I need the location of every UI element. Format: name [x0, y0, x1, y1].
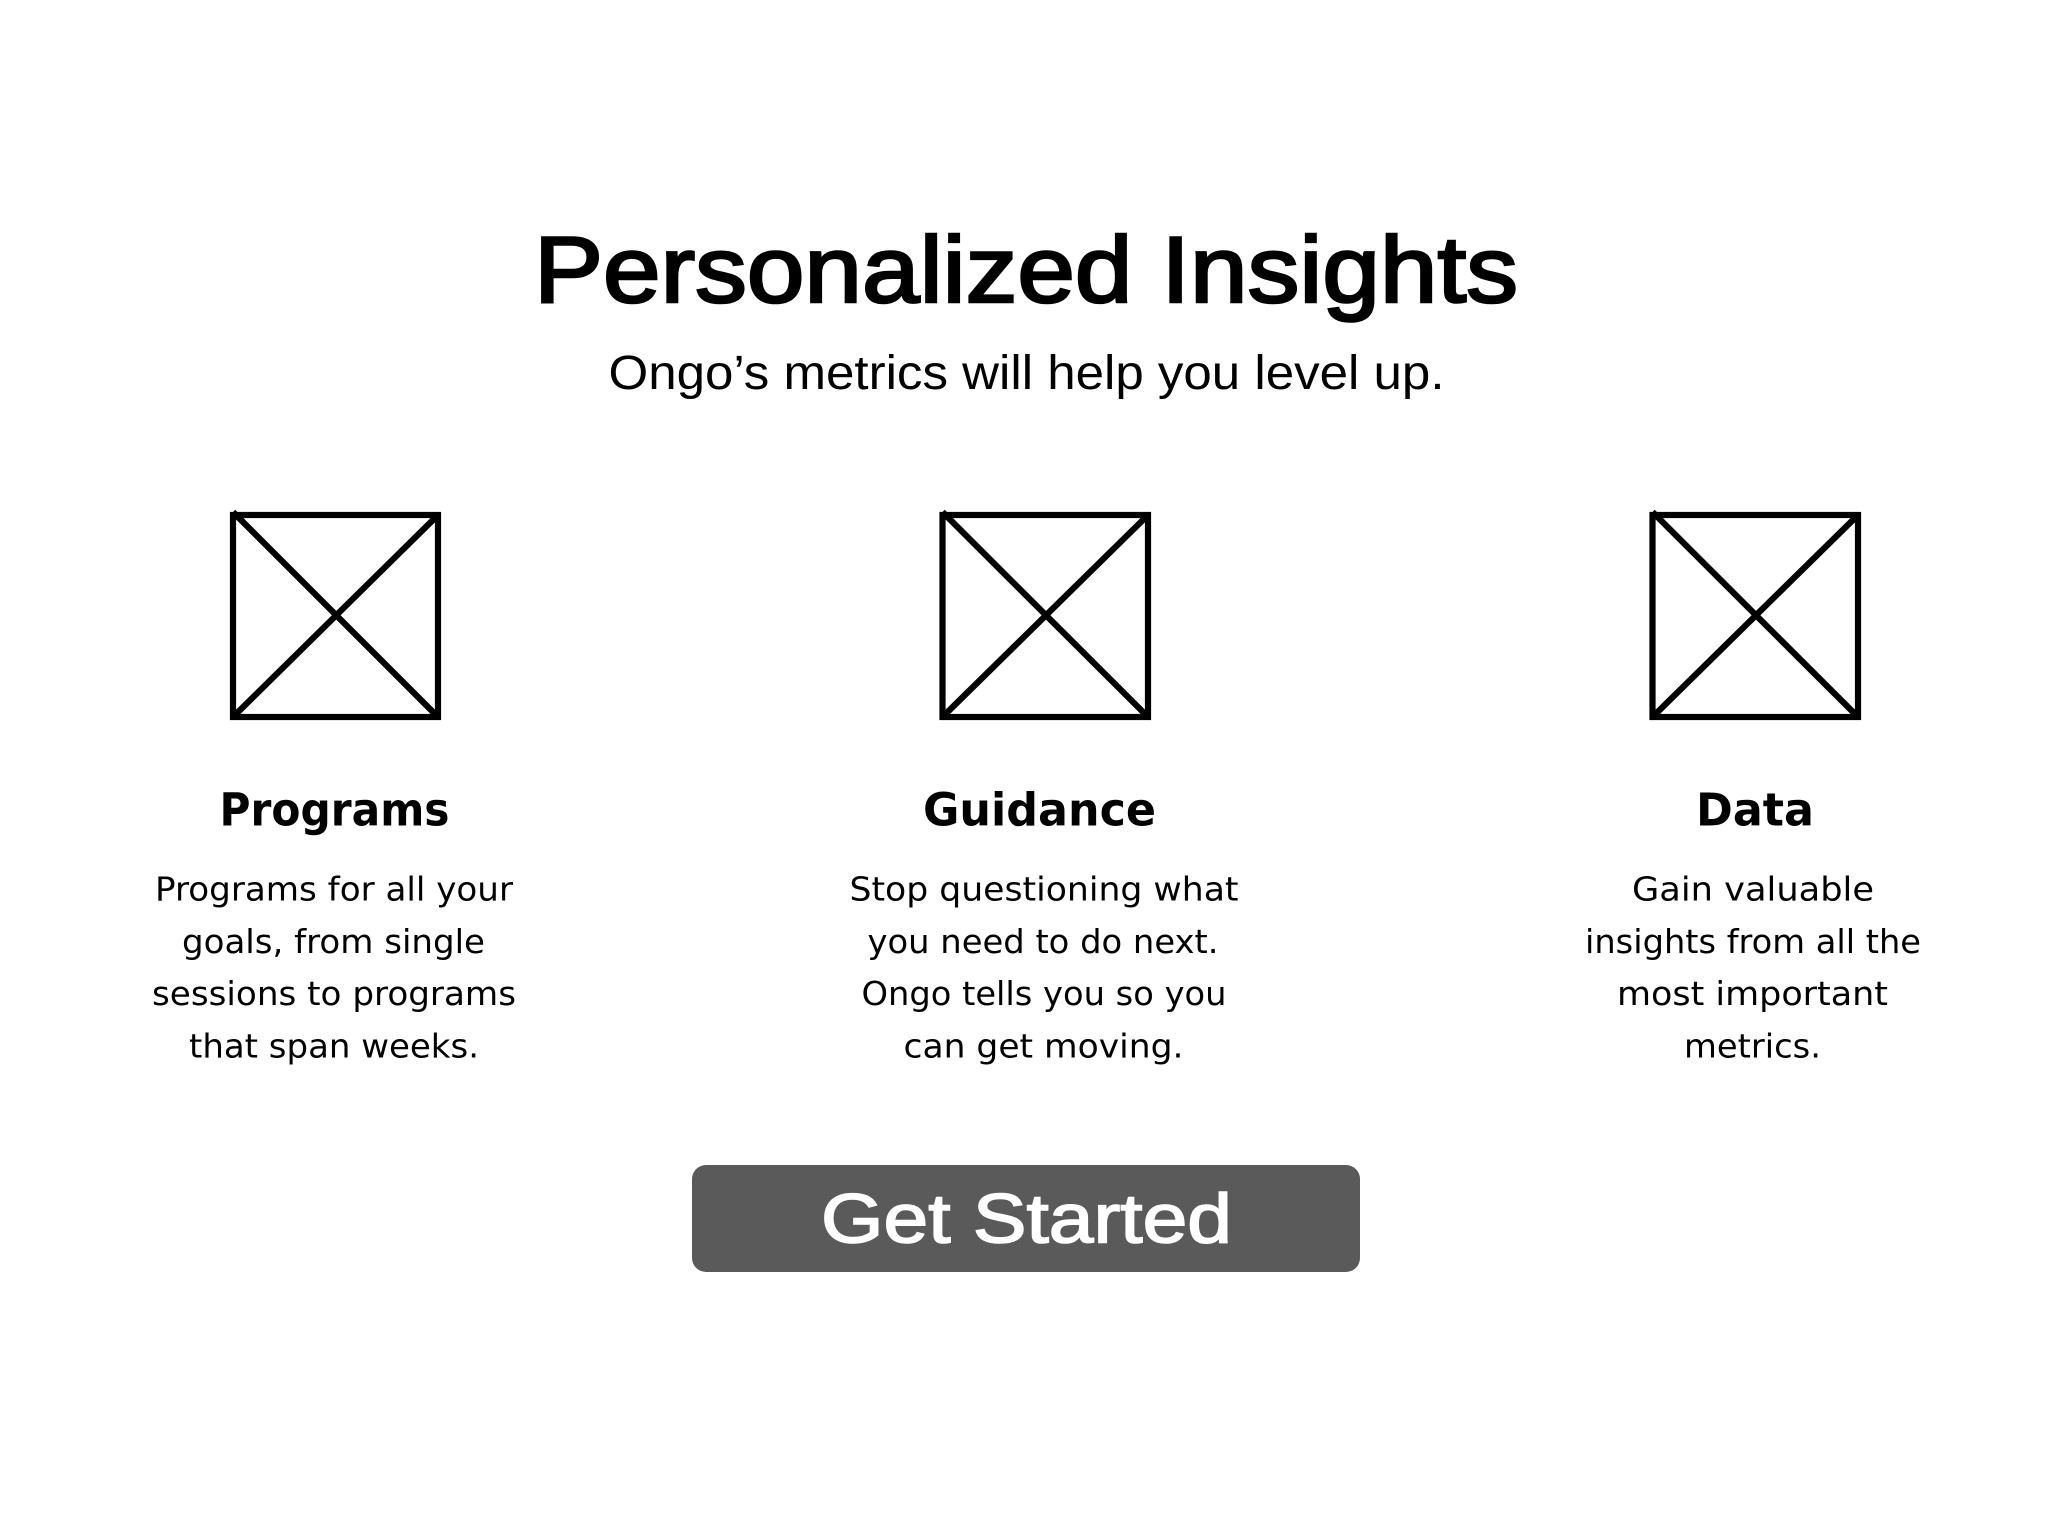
subtitle: Ongo’s metrics will help you level up.: [608, 347, 1444, 400]
text block: guidance: Ongo tells you so you: [862, 974, 1226, 1013]
title: Personalized Insights: [534, 217, 1518, 322]
text block: guidance: can get moving.: [904, 1026, 1184, 1066]
text block: guidance: [850, 870, 1239, 1066]
button: get started: [692, 1165, 1360, 1272]
text block: programs: Programs for all your: [155, 870, 513, 908]
panel: programs: [152, 512, 516, 1066]
text block: guidance: Stop questioning what: [850, 870, 1239, 908]
text block: data: insights from all the: [1585, 922, 1921, 961]
panel: data: [1585, 512, 1921, 1066]
text block: data: Gain valuable: [1632, 870, 1874, 908]
heading: data: Data: [1696, 784, 1814, 836]
button: get started: Get Started: [821, 1180, 1232, 1258]
panel: guidance: [850, 512, 1239, 1066]
icon: data placeholder: [1652, 512, 1858, 717]
heading: programs: Programs: [220, 784, 450, 836]
text block: programs: goals, from single: [182, 922, 485, 961]
text block: data: most important: [1617, 974, 1888, 1013]
text block: guidance: you need to do next.: [868, 922, 1218, 961]
text block: programs: sessions to programs: [152, 974, 516, 1013]
icon: guidance placeholder: [942, 512, 1148, 717]
text block: data: [1585, 870, 1921, 1066]
icon: programs placeholder: [233, 512, 438, 717]
text block: programs: [152, 870, 516, 1066]
heading: guidance: Guidance: [923, 784, 1156, 836]
text block: programs: that span weeks.: [189, 1026, 479, 1066]
text block: data: metrics.: [1684, 1026, 1821, 1066]
